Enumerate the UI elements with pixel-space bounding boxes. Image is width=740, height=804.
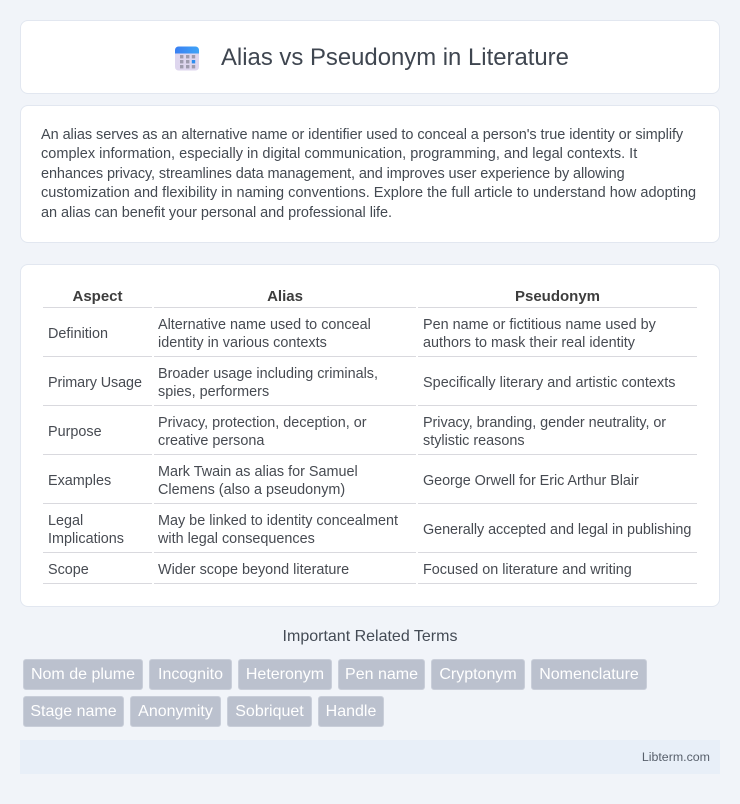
tag list: related terms: Handle (326, 703, 376, 720)
tag list: related terms: Nom de plume (31, 666, 135, 683)
tag list: related terms: Heteronym (246, 666, 324, 683)
tag list: related terms: Stage name (30, 703, 117, 720)
panel: header (20, 20, 720, 94)
table: comparison: authors to mask their real identity (423, 335, 635, 351)
table: comparison: Clemens (also a pseudonym) (158, 482, 345, 498)
table: comparison: Primary Usage (48, 375, 142, 391)
text block: intro: complex information, especially in digital communication, programming, and legal contexts. It (41, 146, 637, 162)
table: comparison: Pen name or fictitious name used by (423, 317, 656, 333)
heading: related terms: Important Related Terms (283, 628, 457, 645)
footer credit: Libterm.com (642, 750, 710, 764)
table: comparison: George Orwell for Eric Arthur Blair (423, 473, 639, 489)
text block: intro: An alias serves as an alternative name or identifier used to conceal a person's true identity or simplify (41, 127, 683, 143)
table: comparison: with legal consequences (158, 531, 315, 547)
table: comparison: stylistic reasons (423, 433, 525, 449)
table: comparison: Privacy, protection, deception, or (158, 415, 367, 431)
column headers: Alias (267, 288, 303, 305)
text block: intro: customization and flexibility in naming conventions. Explore the full article to understand how adopting (41, 185, 696, 201)
tag list: related terms: Anonymity (138, 703, 213, 720)
text block: intro: an alias can benefit your personal and professional life. (41, 205, 392, 221)
table: comparison: Broader usage including criminals, (158, 366, 378, 382)
table: comparison: Privacy, branding, gender neutrality, or (423, 415, 666, 431)
table: comparison: Definition (48, 326, 108, 342)
table: comparison: Wider scope beyond literature (158, 562, 349, 578)
column headers (72, 288, 600, 305)
column headers: Pseudonym (515, 288, 600, 305)
table: comparison: creative persona (158, 433, 264, 449)
column headers: Aspect (72, 288, 123, 305)
table: comparison: Focused on literature and writing (423, 562, 632, 578)
table: comparison: Purpose (48, 424, 102, 440)
title: Alias vs Pseudonym in Literature (221, 44, 569, 71)
table: comparison: Mark Twain as alias for Samuel (158, 464, 358, 480)
tag list: related terms: Incognito (158, 666, 223, 683)
table: comparison: Legal (48, 513, 83, 529)
table: comparison: Alternative name used to conceal (158, 317, 371, 333)
table: comparison: identity in various contexts (158, 335, 327, 351)
table: comparison: Examples (48, 473, 111, 489)
tag list: related terms: Pen name (345, 666, 418, 683)
tag list: related terms: Sobriquet (235, 703, 304, 720)
panel: intro paragraph (20, 105, 720, 243)
table: comparison: May be linked to identity concealment (158, 513, 398, 529)
text block: intro (41, 127, 696, 221)
tag list: related terms: Cryptonym (439, 666, 517, 683)
footer bar (20, 740, 720, 774)
tag list: related terms: Nomenclature (539, 666, 639, 683)
table: comparison: Generally accepted and legal in publishing (423, 522, 691, 538)
table: comparison: Specifically literary and artistic contexts (423, 375, 675, 391)
table: comparison (43, 288, 697, 584)
table: comparison: Scope (48, 562, 89, 578)
table: comparison: spies, performers (158, 384, 269, 400)
table: comparison: Implications (48, 531, 124, 547)
panel: comparison table (20, 264, 720, 607)
icon: calendar grid (175, 46, 199, 70)
text block: intro: enhances privacy, streamlines data management, and improves user experience by allowing (41, 166, 625, 182)
tag list: related terms (23, 659, 647, 727)
